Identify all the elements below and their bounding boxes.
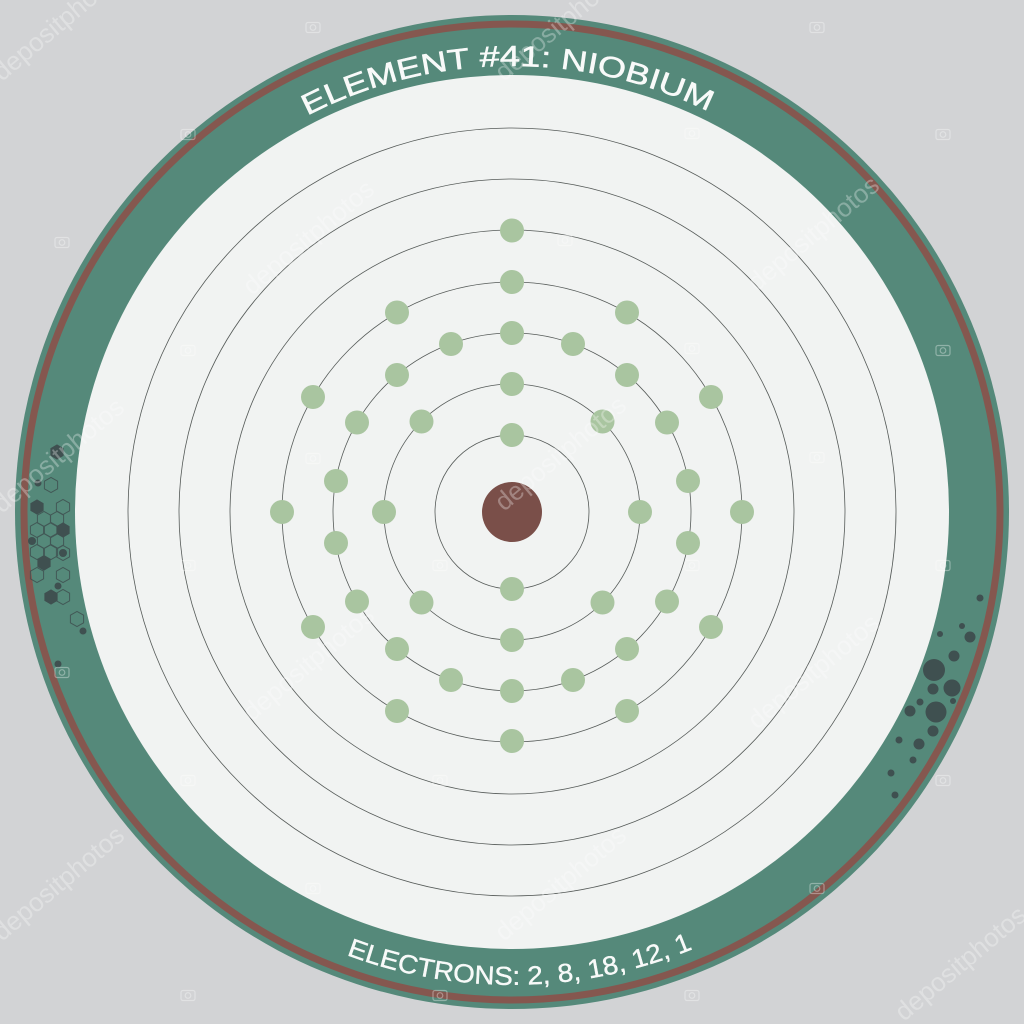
bubble decoration	[888, 594, 984, 798]
hexagon decoration	[28, 444, 86, 668]
shell 3: 18 electrons	[324, 321, 700, 703]
watermark: depositphotos	[742, 170, 885, 297]
title: ELEMENT #41: NIOBIUM	[300, 46, 714, 115]
watermark: depositphotos	[489, 820, 632, 947]
electron configuration caption: ELECTRONS: 2, 8, 18, 12, 1	[348, 934, 692, 988]
electrons	[270, 218, 754, 753]
shell 4: 12 electrons	[270, 270, 754, 753]
watermark: depositphotos	[742, 608, 885, 735]
watermark: depositphotos	[237, 174, 380, 301]
watermark: depositphotos	[237, 600, 380, 727]
shell 2: 8 electrons	[372, 372, 652, 652]
electron shell orbits	[128, 128, 896, 896]
inner white disc	[75, 75, 949, 949]
nucleus	[482, 482, 542, 542]
shell 5: 1 electron	[500, 218, 524, 242]
watermark: depositphotos	[489, 390, 632, 517]
shell 1: 2 electrons	[500, 423, 524, 601]
